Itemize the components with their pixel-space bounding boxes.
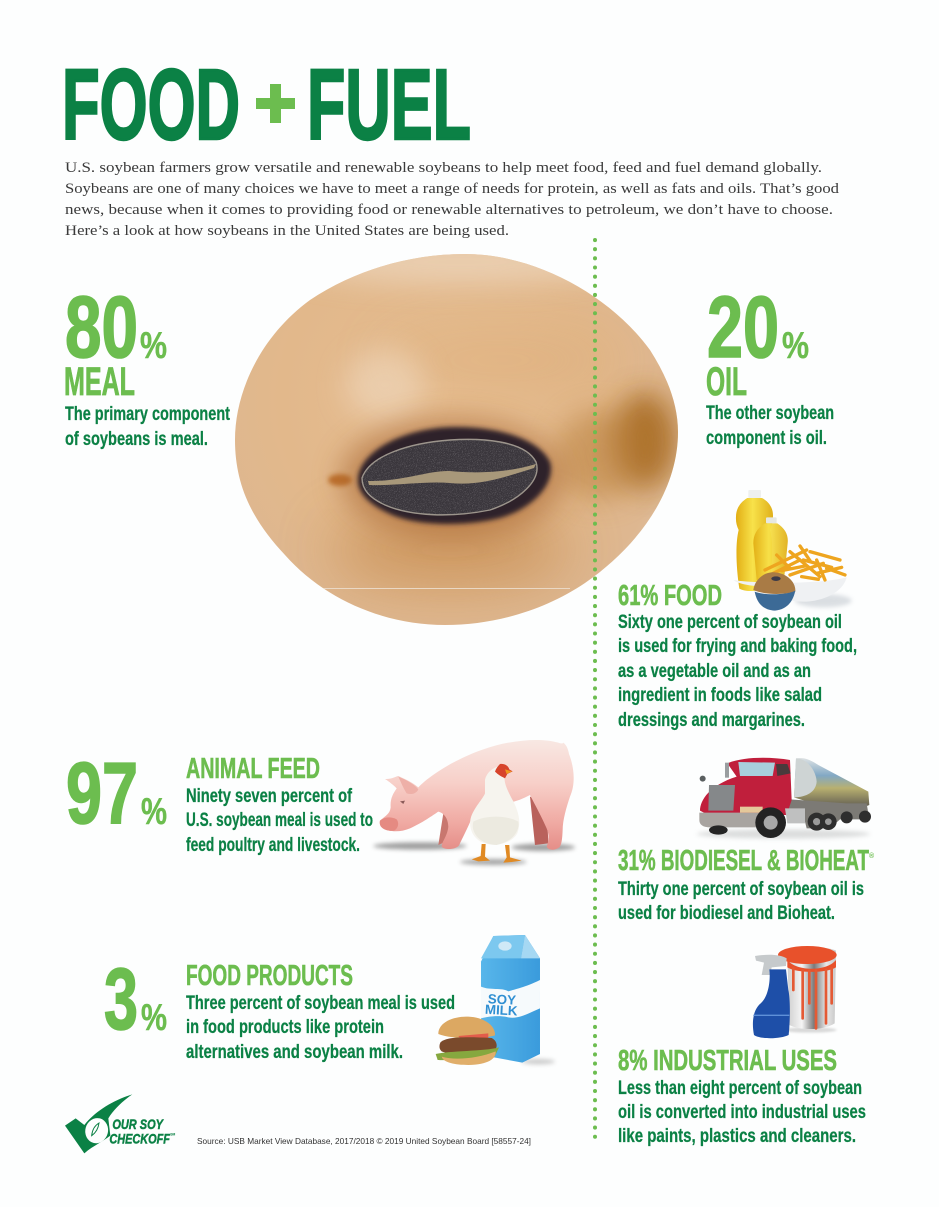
icon: soy milk carton and burger: MILK — [485, 1002, 518, 1019]
text: animal feed description: Ninety seven percent of — [186, 785, 352, 807]
text: food use description: dressings and margarines. — [618, 709, 805, 731]
text: oil description — [706, 402, 834, 449]
panel: meal — [64, 279, 230, 450]
panel: food products — [104, 951, 455, 1063]
icon: pig and chicken — [373, 740, 575, 865]
text: meal description: of soybeans is meal. — [65, 428, 208, 450]
icon: tanker truck — [697, 758, 871, 839]
stat: 3 percent: % — [141, 997, 167, 1038]
text: food use description: ingredient in foods like salad — [618, 684, 822, 706]
heading: animal feed: ANIMAL FEED — [186, 753, 320, 785]
heading: 61% food: 61% FOOD — [618, 580, 722, 612]
stat: 97 percent: 97 — [66, 745, 138, 842]
icon: oil bottles, fries and muffin — [733, 490, 852, 611]
divider: dotted line — [593, 240, 597, 1145]
text: meal description: The primary component — [65, 403, 230, 425]
text: biodiesel description: Thirty one percent of soybean oil is — [618, 878, 864, 900]
text: industrial uses description: Less than eight percent of soybean — [618, 1077, 862, 1099]
logo: our soy checkoff — [65, 1094, 176, 1153]
text: biodiesel description: used for biodiesel and Bioheat. — [618, 902, 835, 924]
text: food products description: alternatives and soybean milk. — [186, 1041, 403, 1063]
intro paragraph: Here’s a look at how soybeans in the United States are being used. — [65, 223, 509, 239]
text: industrial uses description — [618, 1077, 866, 1147]
stat: 80 percent: % — [140, 325, 167, 366]
heading: food products: FOOD PRODUCTS — [186, 960, 353, 992]
icon: spray bottle and paint can — [753, 946, 837, 1038]
text: meal description — [65, 403, 230, 450]
text: oil description: component is oil. — [706, 427, 827, 449]
intro paragraph — [65, 160, 840, 239]
panel: oil — [706, 279, 834, 449]
logo: our soy checkoff: OUR SOY — [112, 1117, 165, 1132]
heading: 8% industrial uses: 8% INDUSTRIAL USES — [618, 1045, 837, 1077]
title: FOOD — [62, 49, 240, 161]
text: food use description: is used for frying and baking food, — [618, 635, 857, 657]
heading: 31% biodiesel and bioheat: ® — [869, 852, 875, 860]
panel: biodiesel and bioheat — [618, 845, 875, 924]
text: animal feed description — [186, 785, 373, 856]
intro paragraph: news, because when it comes to providing food or renewable alternatives to petroleum, we don’t have to choose. — [65, 202, 833, 218]
logo: our soy checkoff: SM — [170, 1133, 176, 1137]
title: FUEL — [307, 49, 471, 161]
illustration: soybean — [235, 240, 678, 625]
chicken — [470, 764, 522, 863]
logo: our soy checkoff: CHECKOFF — [109, 1132, 171, 1147]
icon: soy milk carton and burger — [436, 935, 555, 1065]
text: food use description: Sixty one percent of soybean oil — [618, 611, 842, 633]
text: biodiesel description — [618, 878, 864, 924]
text: animal feed description: feed poultry and livestock. — [186, 834, 360, 856]
stat: 97 percent: % — [141, 791, 167, 832]
stat: 20 percent: 20 — [707, 279, 779, 376]
text: animal feed description: U.S. soybean meal is used to — [186, 809, 373, 831]
panel: animal feed — [66, 745, 373, 856]
intro paragraph: Soybeans are one of many choices we have to meet a range of needs for protein, as well as fats and oils. That’s good — [65, 181, 840, 197]
text: food products description: Three percent of soybean meal is used — [186, 992, 455, 1014]
text: oil description: The other soybean — [706, 402, 834, 424]
intro paragraph: U.S. soybean farmers grow versatile and renewable soybeans to help meet food, feed and fuel demand globally. — [65, 160, 822, 176]
stat: 20 percent: % — [782, 325, 809, 366]
text: food products description — [186, 992, 455, 1063]
text: food products description: in food products like protein — [186, 1016, 384, 1038]
text: industrial uses description: like paints, plastics and cleaners. — [618, 1125, 856, 1147]
panel: food use — [618, 580, 857, 731]
stat: 3 percent: 3 — [104, 951, 138, 1048]
text: food use description: as a vegetable oil and as an — [618, 660, 811, 682]
text: food use description — [618, 611, 857, 731]
heading: oil: OIL — [706, 360, 747, 404]
icon: soy milk carton and burger: SOY — [487, 991, 516, 1008]
heading: meal: MEAL — [64, 360, 135, 404]
stat: 80 percent: 80 — [65, 279, 138, 376]
source note: Source: USB Market View Database, 2017/2018 © 2019 United Soybean Board [58557-24] — [197, 1137, 531, 1146]
panel: industrial uses — [618, 1045, 866, 1147]
text: industrial uses description: oil is converted into industrial uses — [618, 1101, 866, 1123]
